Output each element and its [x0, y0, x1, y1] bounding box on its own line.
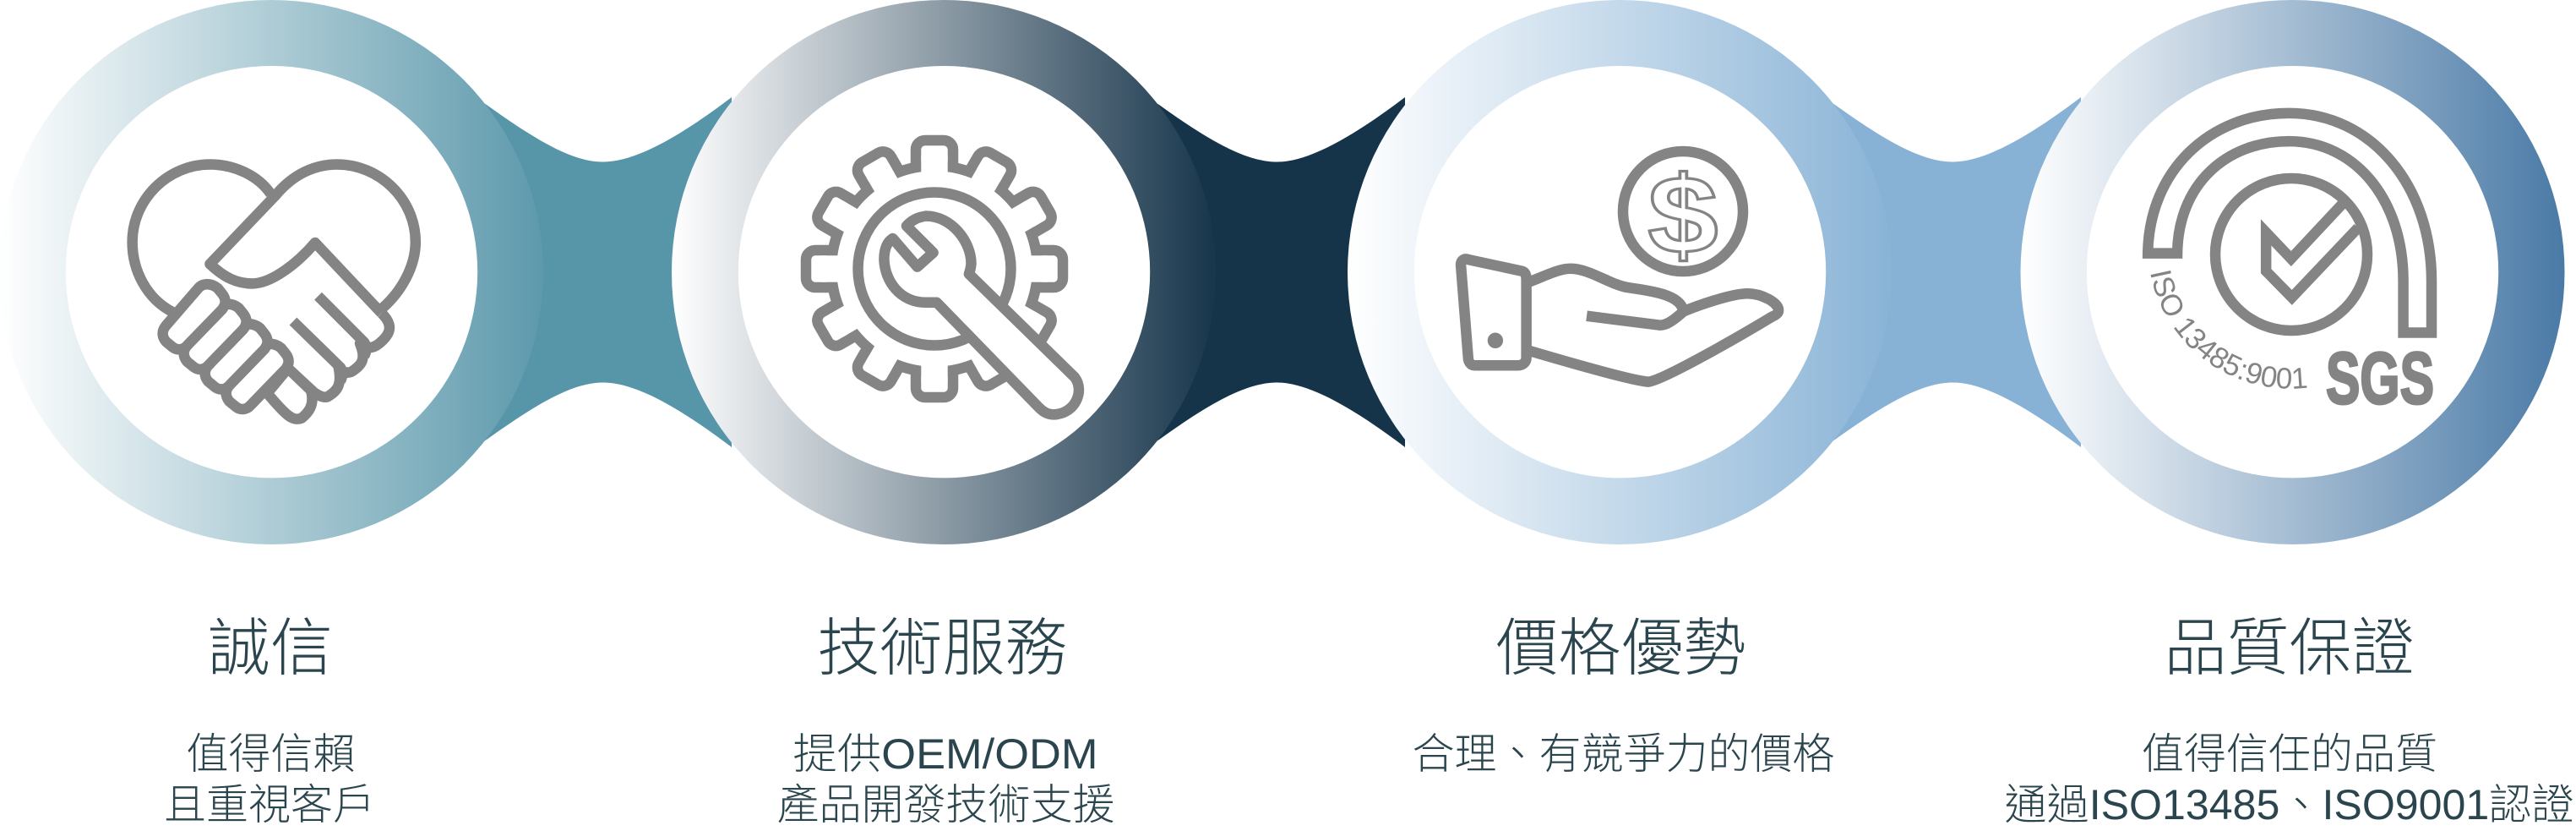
icon: SGS ISO certification mark: SGS: [2326, 338, 2434, 419]
panel: quality circle: [2021, 0, 2565, 544]
heading: technical service: 技術服務: [818, 613, 1068, 683]
icon: SGS ISO certification mark: ISO 13485:9001: [2151, 271, 2306, 389]
icon: handshake heart: [133, 164, 416, 419]
panel: integrity circle: [0, 0, 543, 544]
connector: technical service to price: [1133, 89, 1405, 456]
panel: technical service circle: [672, 0, 1216, 544]
text: integrity description: [164, 730, 375, 828]
text: technical service description: 產品開發技術支援: [777, 781, 1115, 828]
heading: integrity: 誠信: [208, 613, 333, 683]
heading: quality assurance: 品質保證: [2165, 613, 2415, 683]
text: quality description: 通過ISO13485、ISO9001認證: [2004, 781, 2573, 828]
icon: hand holding coin: [1461, 151, 1778, 382]
icon: SGS ISO certification mark: [2143, 108, 2437, 419]
text: integrity description: 且重視客戶: [164, 781, 375, 828]
text: technical service description: 提供OEM/ODM: [792, 730, 1098, 778]
icon: hand holding coin: $: [1647, 153, 1718, 276]
text: quality description: [2004, 730, 2573, 828]
text: quality description: 值得信任的品質: [2142, 730, 2437, 778]
connector: price to quality: [1809, 89, 2081, 456]
connector: integrity to technical service: [460, 89, 732, 456]
text: price description: 合理、有競爭力的價格: [1413, 730, 1835, 778]
panel: price circle: [1348, 0, 1892, 544]
heading: price advantage: 價格優勢: [1495, 613, 1745, 683]
text: integrity description: 值得信賴: [186, 730, 355, 778]
text: technical service description: [777, 730, 1115, 828]
icon: gear and wrench: [806, 140, 1079, 414]
